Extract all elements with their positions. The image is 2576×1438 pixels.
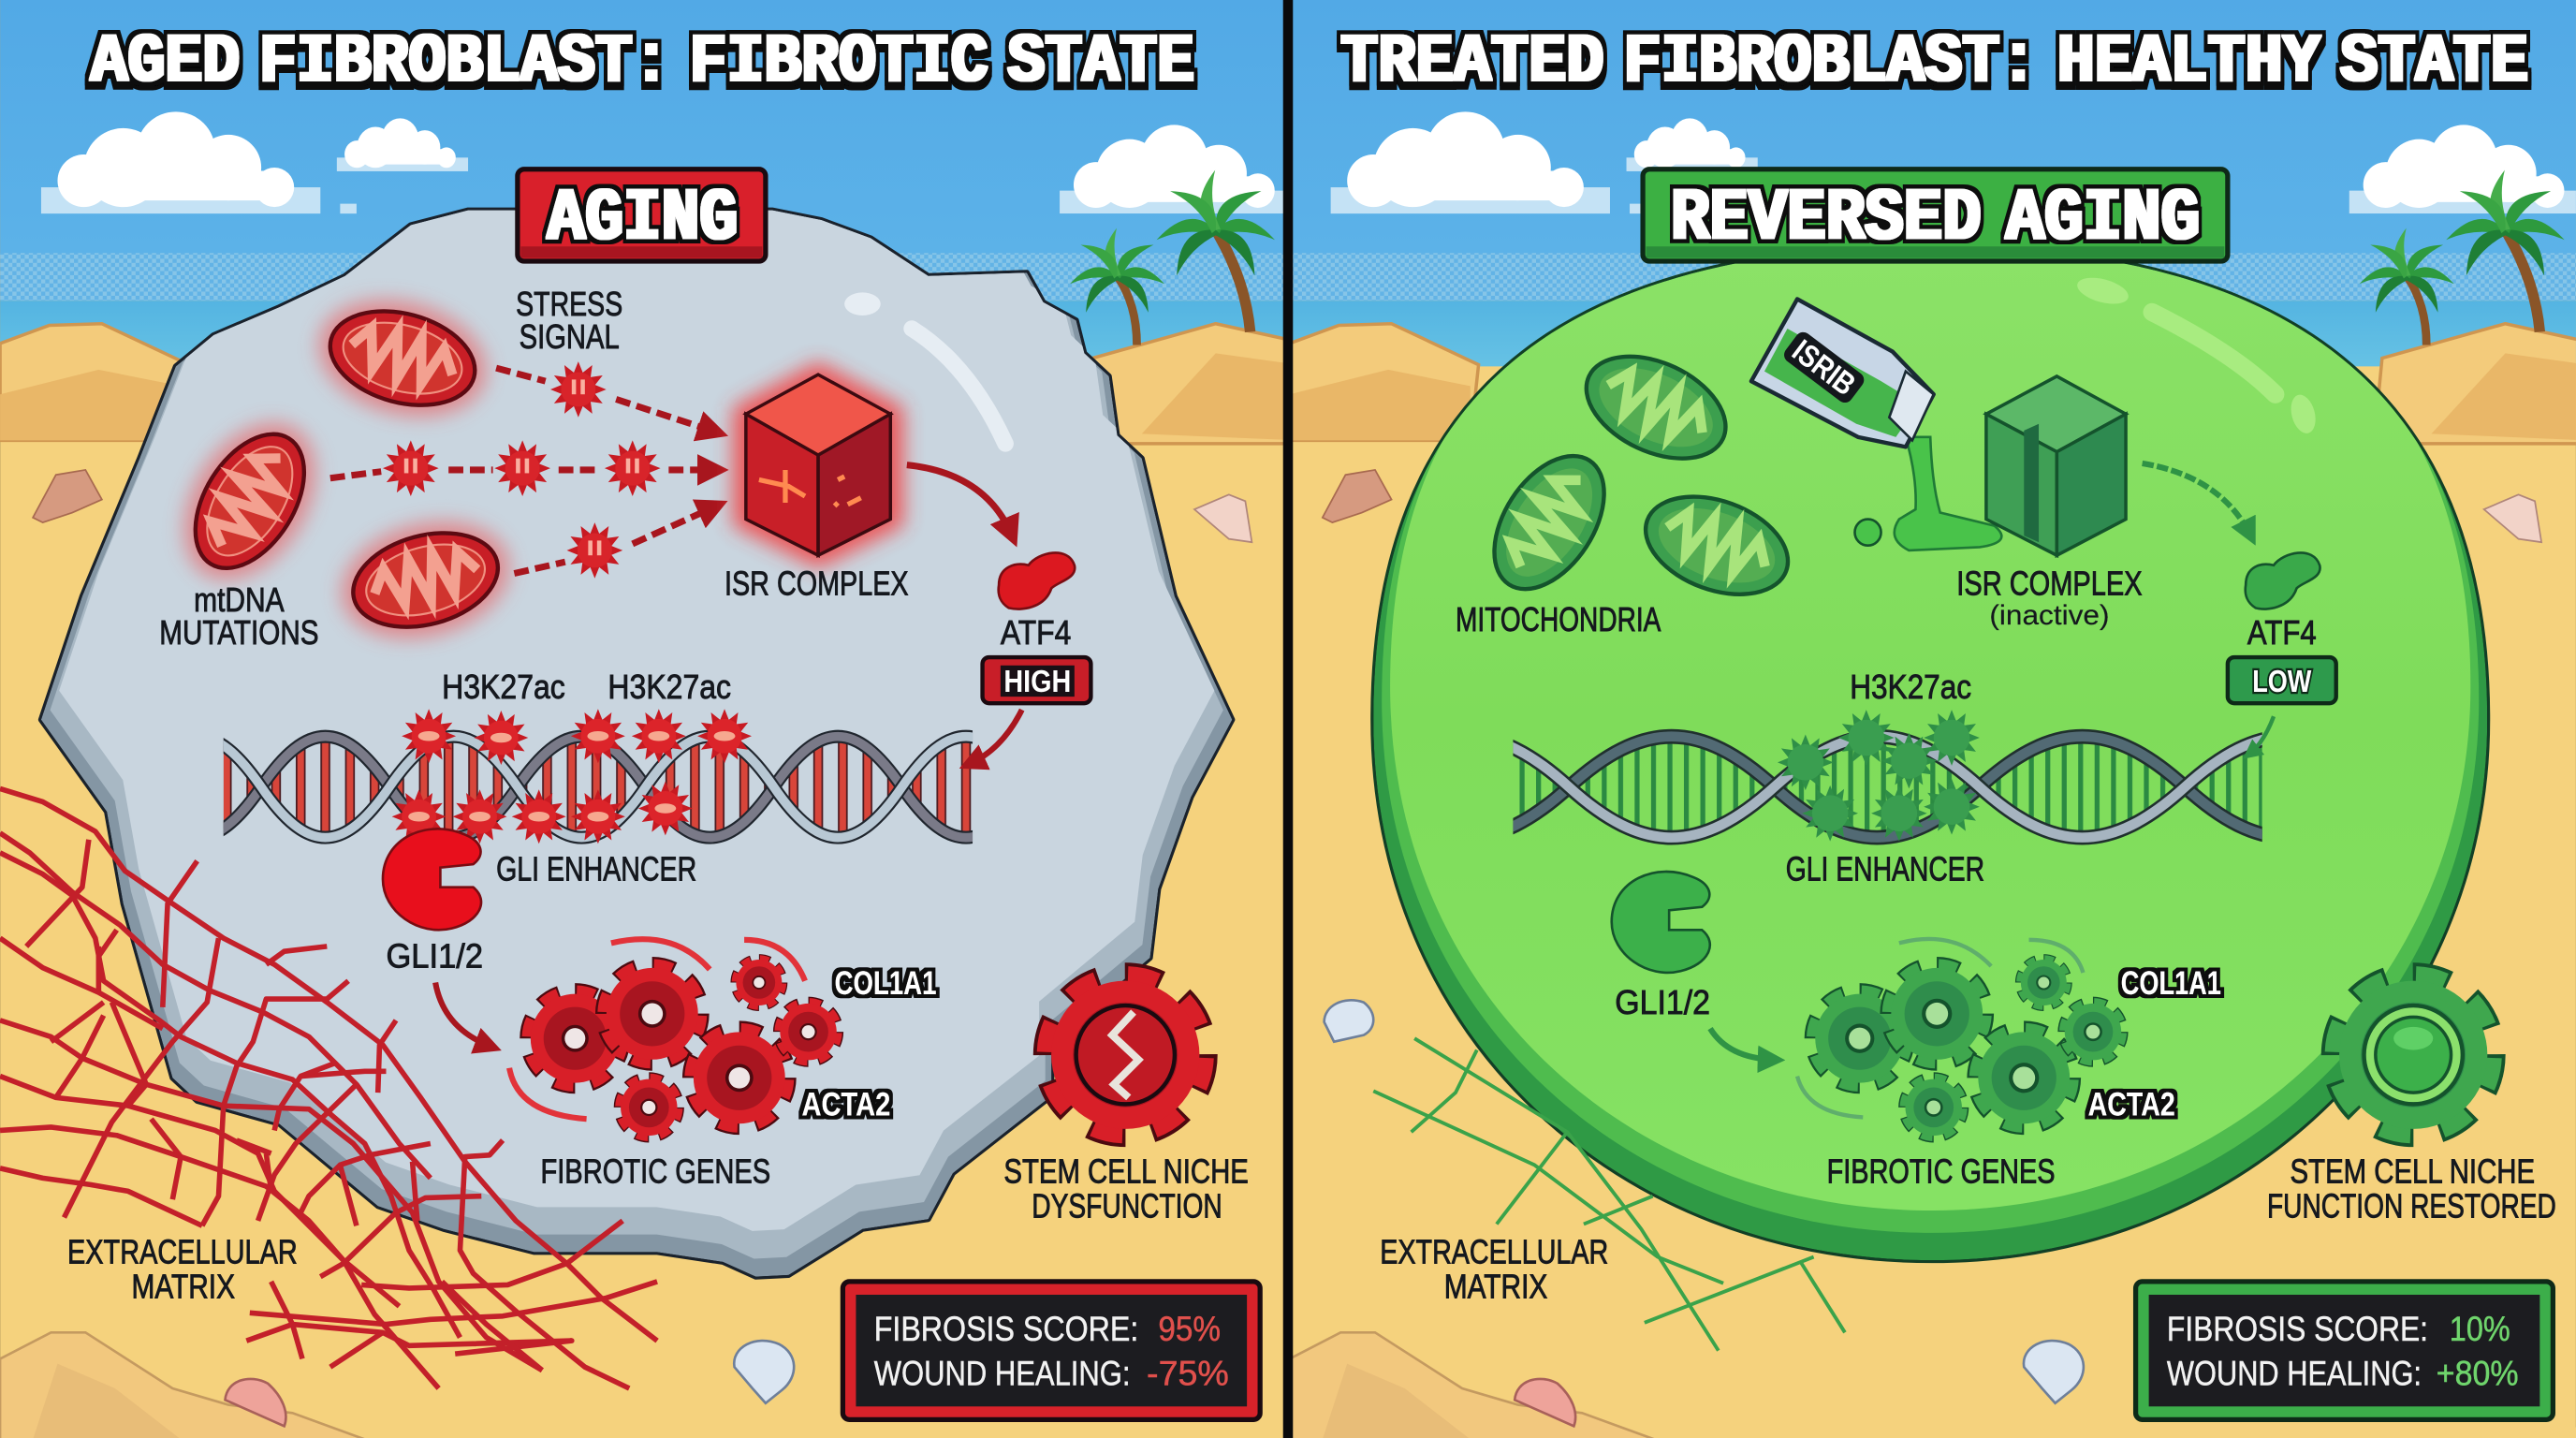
score box: treated: WOUND HEALING: [2167,1354,2422,1392]
green histone marks [1778,710,1980,842]
GLI1/2 protein bound [383,829,481,930]
label: COL1A1: COL1A1 [2121,965,2221,1002]
label: ATF4: ATF4 [2247,613,2317,652]
label: ISR complex inactive: (inactive) [1989,600,2110,631]
labels: H3K27ac [442,668,731,706]
badge: HIGH [983,657,1090,703]
label: extracellular matrix [1380,1233,1608,1305]
grey fibrotic cell body [41,197,1232,1277]
labels: H3K27ac: H3K27ac [607,668,731,706]
stress signal particles [383,361,661,579]
label: stem cell niche dysfunction: DYSFUNCTION [1032,1186,1222,1225]
H3K27ac histone marks [392,709,752,844]
label: ACTA2: ACTA2 [802,1087,890,1123]
ATF4 blob low [2246,552,2320,609]
green healthy cell body [1373,227,2487,1260]
extra shell on sand [1325,1000,1373,1042]
arrow: GLI to genes faint [1710,1029,1774,1060]
label: H3K27ac: H3K27ac [1850,668,1971,706]
score box: treated [2136,1282,2553,1419]
label: mitochondria: MITOCHONDRIA [1456,600,1661,638]
ATF4 blob high [999,552,1075,609]
label: ATF4: ATF4 [1001,613,1071,652]
icon: broken stem cell niche gear [1044,974,1207,1137]
badge: LOW [2228,657,2336,703]
arrow: ATF4 to DNA [970,710,1022,764]
label: extracellular matrix: EXTRACELLULAR [1380,1233,1608,1271]
label: COL1A1: COL1A1 [835,965,936,1002]
score box: aged: 95% [1158,1310,1221,1348]
label: fibrotic genes: FIBROTIC GENES [540,1152,770,1191]
label: mtDNA mutations: mtDNA [194,580,285,619]
extracellular matrix, sparse green fibres [1373,1038,1845,1351]
label: stem cell niche dysfunction: STEM CELL NICHE [1003,1152,1249,1191]
label: stress signal [516,285,622,356]
score box: treated: 10% [2450,1310,2510,1348]
badge: HIGH: HIGH [1003,665,1071,699]
label: GLI enhancer: GLI ENHANCER [496,850,696,888]
extracellular matrix, dense red fibres [0,788,657,1388]
label: extracellular matrix: MATRIX [1444,1267,1547,1305]
arrow: ATF4 to DNA faint [2249,716,2274,755]
mitochondria with glow [157,282,522,656]
label: mtDNA mutations: MUTATIONS [159,613,319,652]
label: stress signal: STRESS [516,285,622,323]
GLI1/2 protein free [1612,872,1710,973]
beach background: right panel [1290,0,2576,1438]
arrow: ISR to ATF4 faint [2143,463,2250,536]
label: extracellular matrix [67,1233,298,1305]
ISR complex, inactive split cube [1986,376,2126,555]
banner: aging: AGING [547,176,738,260]
label: extracellular matrix: EXTRACELLULAR [67,1233,298,1271]
beach background: left panel [0,0,1298,1438]
healthy mitochondria [1471,336,1801,612]
label: fibrotic genes: FIBROTIC GENES [1827,1152,2056,1191]
panel: aged fibroblast, fibrotic state [0,24,1260,1419]
label: ISR complex inactive: ISR COMPLEX [1956,564,2143,602]
label: ISR complex inactive [1956,564,2143,631]
score box: aged: WOUND HEALING: [874,1354,1131,1392]
label: stem cell niche restored [2267,1152,2556,1225]
fibrotic gene gears spinning [509,939,840,1138]
badge: LOW: LOW [2252,665,2312,699]
label: ACTA2: ACTA2 [2088,1087,2175,1123]
panel: treated fibroblast, healthy state [1325,24,2556,1419]
dashed arrows to ISR complex [330,368,716,574]
arrow: ISR to ATF4 [907,465,1012,536]
label: extracellular matrix: MATRIX [131,1267,235,1305]
quiet gene gears [1797,939,2124,1138]
label: GLI1/2: GLI1/2 [386,937,483,976]
score box: aged: -75% [1147,1354,1229,1392]
title: aged fibroblast: AGED FIBROBLAST: FIBROTIC STATE [91,24,1194,102]
label: mtDNA mutations [159,580,319,652]
ISRIB bottle pouring: ISRIB [1786,333,1862,403]
score box: aged [842,1282,1260,1419]
score box: aged: FIBROSIS SCORE: [874,1310,1138,1348]
DNA helix, active [223,730,973,844]
DNA helix, quiet [1513,728,2262,844]
label: GLI1/2: GLI1/2 [1615,983,1710,1021]
ISRIB bottle pouring [1751,299,2001,550]
label: ISR complex: ISR COMPLEX [724,564,909,602]
label: stem cell niche dysfunction [1003,1152,1249,1225]
ISR complex cube, glowing [733,361,903,568]
score box: treated: FIBROSIS SCORE: [2167,1310,2428,1348]
score box: treated: +80% [2437,1354,2519,1392]
banner: reversed aging: REVERSED AGING [1671,176,2200,260]
label: GLI enhancer: GLI ENHANCER [1786,850,1984,888]
divider between panels [1283,0,1293,1438]
label: stress signal: SIGNAL [520,317,620,356]
icon: restored stem cell niche gear [2332,974,2495,1137]
labels: H3K27ac: H3K27ac [442,668,565,706]
arrow: GLI to genes [435,983,491,1047]
